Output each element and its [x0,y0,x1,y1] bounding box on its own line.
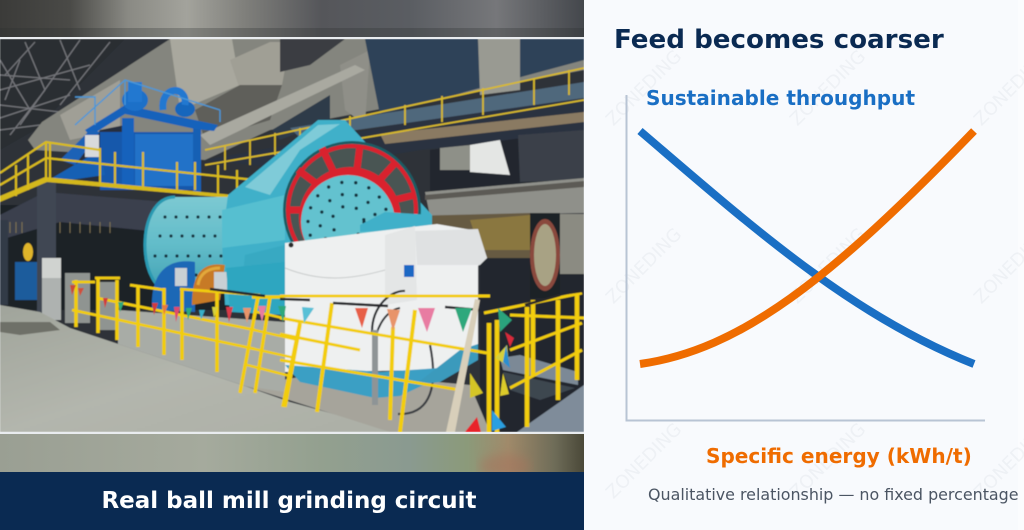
throughput curve [640,131,974,364]
watermarks: ZONEDING [786,419,870,503]
caption text: Real ball mill grinding circuit [101,488,477,514]
chart title: Feed becomes coarser [614,25,944,55]
mill trunnion hood [222,120,432,310]
black rail stripes [210,289,582,310]
watermarks: ZONEDING [786,224,870,308]
caption bar [0,472,584,530]
energy label: Specific energy (kWh/t) [706,444,972,468]
left background equipment [15,243,118,330]
red ring gear [282,140,422,243]
photo: ball mill grinding circuit [0,39,584,432]
panel: chart [584,0,1024,530]
white motor and gearbox [285,224,487,414]
right railing [484,293,584,432]
mill head disc [300,174,395,241]
panel: ball mill photo [0,0,584,478]
concrete plinth [118,310,285,392]
building background [0,39,584,432]
photo frame lines [0,37,584,434]
blurred band above photo [0,0,584,37]
watermarks: ZONEDING [602,224,686,308]
wooden pole [446,299,480,432]
blurred band below photo [0,434,584,472]
watermarks: ZONEDING [602,46,686,130]
left railing [72,278,260,372]
teal motor base [285,330,478,405]
middle railing [280,296,490,432]
throughput label: Sustainable throughput [646,86,915,110]
ball mill [145,120,432,310]
blue drive and orange coupling [152,261,285,315]
blue hydrocyclone unit [52,80,220,194]
mill shell [146,196,228,282]
access ladder [240,297,300,407]
under platform shadow [0,205,240,310]
yellow platform [0,142,255,202]
axes [626,95,985,420]
bunting flags [70,285,514,432]
watermarks [602,46,1024,503]
upper yellow walkway and pipes [205,68,584,170]
far right catwalk grating [500,355,584,432]
energy curve [640,131,974,364]
yellow safety railings [72,278,584,432]
floor [0,305,400,432]
watermarks: ZONEDING [786,46,870,130]
note: Qualitative relationship — no fixed percentage [648,485,1019,504]
watermarks: ZONEDING [602,419,686,503]
